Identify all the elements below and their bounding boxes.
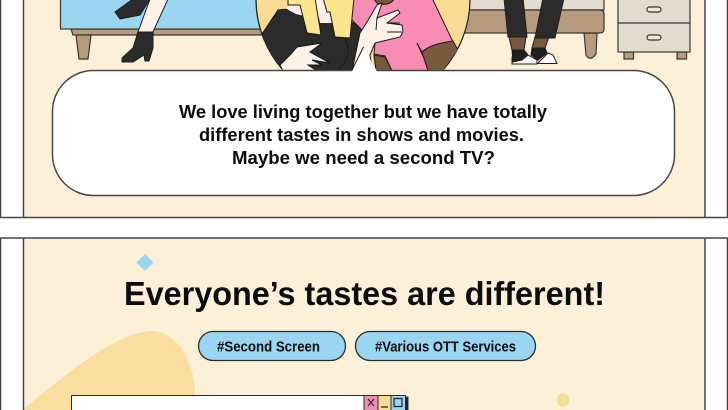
bubble text: different tastes in shows and movies. xyxy=(199,125,524,145)
couple in yellow circle xyxy=(255,0,471,70)
dresser xyxy=(618,0,690,59)
panel: living room scene xyxy=(0,0,728,218)
yellow dot xyxy=(556,394,570,406)
bubble text: Maybe we need a second TV? xyxy=(232,148,495,168)
yellow blob xyxy=(24,331,195,410)
bubble text: We love living together but we have totally xyxy=(179,102,547,122)
hair right xyxy=(323,0,354,38)
hashtag: second screen xyxy=(198,332,346,360)
hashtag: various OTT services xyxy=(356,332,536,360)
speech bubble xyxy=(52,47,674,196)
hashtag: various OTT services: #Various OTT Services xyxy=(375,338,516,356)
diamond icon xyxy=(136,254,154,271)
panel: everyone's tastes xyxy=(0,238,728,410)
white neck xyxy=(315,0,332,23)
close button xyxy=(364,396,378,410)
minimize button xyxy=(378,396,391,410)
hashtag: second screen: #Second Screen xyxy=(217,338,320,356)
hair left xyxy=(288,0,321,35)
man small hand xyxy=(374,55,392,71)
white collar xyxy=(285,6,302,16)
man arm xyxy=(422,41,458,71)
left person legs and boots xyxy=(115,0,168,62)
woman torso xyxy=(258,9,365,70)
man hand xyxy=(352,3,403,71)
browser window xyxy=(72,396,408,410)
title: Everyone’s tastes are different! xyxy=(124,275,605,312)
left sofa xyxy=(60,0,270,59)
bubble text xyxy=(179,102,547,168)
maximize button xyxy=(391,396,406,410)
man neck xyxy=(373,0,395,4)
man shirt xyxy=(350,0,453,71)
right sofa xyxy=(462,0,604,58)
right person legs and shoes xyxy=(504,0,564,64)
woman hand xyxy=(280,43,330,71)
